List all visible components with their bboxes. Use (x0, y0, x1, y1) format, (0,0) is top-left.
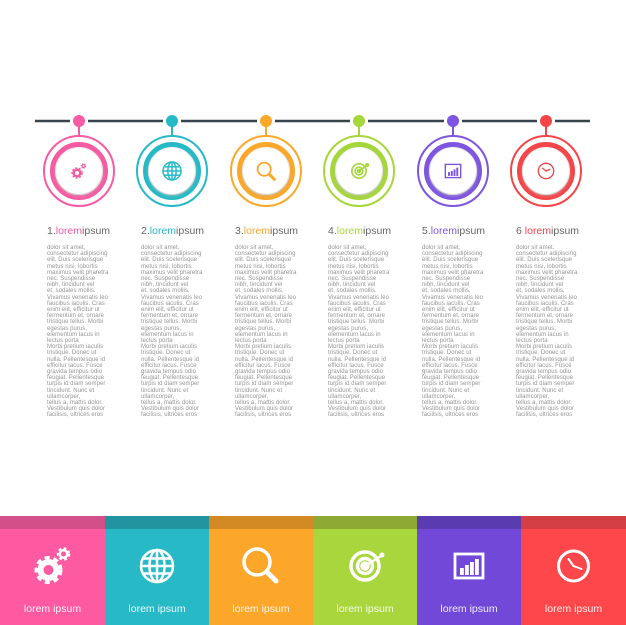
column 6 text: tincidunt. Nunc et (516, 388, 563, 394)
column 3 text: tellus a, mattis dolor. (235, 400, 291, 406)
column 3 text: nibh, tincidunt vel (235, 282, 282, 288)
column 2 text: tincidunt. Nunc et (141, 388, 188, 394)
node 4 (324, 115, 394, 206)
icon: globe (163, 162, 181, 180)
column 2 text: tristique. Donec ut (141, 350, 190, 356)
column 5 text: tristique tellus. Morbi (422, 319, 478, 325)
column 6 text: nec. Suspendisse (516, 276, 564, 282)
band tile 6 (521, 516, 626, 625)
column 5 text: turpis id diam semper (422, 381, 480, 387)
column 6 text: et, sodales mollis. (516, 288, 565, 294)
column 2 text: turpis id diam semper (141, 381, 199, 387)
column 2 text: enim elit, efficitur ut (141, 307, 194, 313)
icon: chart white (454, 552, 484, 580)
column 1 text: turpis id diam semper (47, 381, 105, 387)
column 2 text: ullamcorper, (141, 394, 174, 400)
column 2 text: Vivamus venenatis leo (141, 295, 202, 301)
column 1 text: fermentum et, ornare (47, 313, 104, 319)
column 6 text: consectetur adipiscing (516, 251, 576, 257)
column 2 text: egestas purus, (141, 326, 181, 332)
column 5 text: elementum lacus in (422, 332, 475, 338)
column 1 text: feugiat. Pellentesque (47, 375, 104, 381)
column 5 text (422, 225, 485, 418)
column 6 text: efficitur lacus. Fusce (516, 363, 572, 369)
column 5 text: facilisis, ultrices eros (422, 412, 478, 418)
column 2 text: elit. Duis scelerisque (141, 257, 197, 263)
column 5 text: elit. Duis scelerisque (422, 257, 478, 263)
column 5 text: consectetur adipiscing (422, 251, 482, 257)
column 2 text (141, 225, 204, 418)
icon: gears (72, 164, 86, 178)
column 6 text: enim elit, efficitur ut (516, 307, 569, 313)
column 2 text: metus nisi, lobortis (141, 264, 192, 270)
column 4 text: Vivamus venenatis leo (328, 295, 389, 301)
column 5 text: nec. Suspendisse (422, 276, 470, 282)
column 3 text: ullamcorper, (235, 394, 268, 400)
column 6 text: 6 loremipsum (516, 225, 579, 237)
column 5 text: nibh, tincidunt vel (422, 282, 469, 288)
column 3 text: metus nisi, lobortis (235, 264, 286, 270)
band tile 2 (105, 516, 209, 625)
column 1 text: consectetur adipiscing (47, 251, 107, 257)
column 5 text: ullamcorper, (422, 394, 455, 400)
column 4 text: ullamcorper, (328, 394, 361, 400)
column 1 text: Vestibulum quis dolor (47, 406, 105, 412)
column 2 text: Vestibulum quis dolor (141, 406, 199, 412)
column 1 text: nibh, tincidunt vel (47, 282, 94, 288)
column 3 text: consectetur adipiscing (235, 251, 295, 257)
column 1 text: metus nisi, lobortis (47, 264, 98, 270)
column 6 text: elementum lacus in (516, 332, 569, 338)
column 3 text: turpis id diam semper (235, 381, 293, 387)
column 5 text: metus nisi, lobortis (422, 264, 473, 270)
column 2 text: Morbi pretium iaculis (141, 344, 197, 350)
column 4 text: consectetur adipiscing (328, 251, 388, 257)
icon: target white (349, 550, 384, 582)
column 5 text: faucibus iaculis. Cras (422, 301, 480, 307)
column 4 text: elementum lacus in (328, 332, 381, 338)
column 2 text: tellus a, mattis dolor. (141, 400, 197, 406)
band tile 1 (0, 516, 105, 625)
column 6 text: lectus porta (516, 338, 548, 344)
column 5 text: enim elit, efficitur ut (422, 307, 475, 313)
column 3 text: Vestibulum quis dolor (235, 406, 293, 412)
column 6 text: tristique. Donec ut (516, 350, 565, 356)
column 3 text: feugiat. Pellentesque (235, 375, 292, 381)
column 5 text: tincidunt. Nunc et (422, 388, 469, 394)
column 5 text: lectus porta (422, 338, 454, 344)
band tile 3: lorem ipsum (232, 603, 290, 615)
column 4 text: elit. Duis scelerisque (328, 257, 384, 263)
column 2 text: elementum lacus in (141, 332, 194, 338)
column 5 text: Vestibulum quis dolor (422, 406, 480, 412)
column 6 text: ullamcorper, (516, 394, 549, 400)
column 2 text: tristique tellus. Morbi (141, 319, 197, 325)
column 4 text: feugiat. Pellentesque (328, 375, 385, 381)
column 5 text: fermentum et, ornare (422, 313, 479, 319)
column 3 text: gravida tempus odio (235, 369, 290, 375)
column 1 text: faucibus iaculis. Cras (47, 301, 105, 307)
column 1 text: elementum lacus in (47, 332, 100, 338)
band tile 3 (209, 516, 313, 625)
column 4 text: metus nisi, lobortis (328, 264, 379, 270)
column 1 text: 1.loremipsum (47, 225, 110, 237)
icon: magnifier (258, 163, 274, 179)
column 4 text: Vestibulum quis dolor (328, 406, 386, 412)
icon: chart (445, 164, 461, 178)
column 3 text: enim elit, efficitur ut (235, 307, 288, 313)
column 5 text: nulla. Pellentesque id (422, 357, 480, 363)
band tile 5 (417, 516, 521, 625)
icon: clock white (557, 550, 590, 582)
column 3 text: nec. Suspendisse (235, 276, 283, 282)
band tile 1: lorem ipsum (24, 603, 81, 615)
column 2 text: faucibus iaculis. Cras (141, 301, 199, 307)
column 4 text: tristique. Donec ut (328, 350, 377, 356)
column 6 text: tellus a, mattis dolor. (516, 400, 572, 406)
column 4 text: efficitur lacus. Fusce (328, 363, 384, 369)
column 3 text: faucibus iaculis. Cras (235, 301, 293, 307)
column 2 text: gravida tempus odio (141, 369, 196, 375)
column 6 text: gravida tempus odio (516, 369, 571, 375)
column 6 text: maximus velit pharetra (516, 270, 577, 276)
column 3 text: 3.loremipsum (235, 225, 298, 237)
column 1 text: facilisis, ultrices eros (47, 412, 103, 418)
column 4 text: gravida tempus odio (328, 369, 383, 375)
column 3 text: Vivamus venenatis leo (235, 295, 296, 301)
column 6 text: nibh, tincidunt vel (516, 282, 563, 288)
column 1 text: ullamcorper, (47, 394, 80, 400)
column 2 text: maximus velit pharetra (141, 270, 202, 276)
icon: target (352, 164, 368, 178)
column 6 text: facilisis, ultrices eros (516, 412, 572, 418)
column 2 text: efficitur lacus. Fusce (141, 363, 197, 369)
column 3 text: lectus porta (235, 338, 267, 344)
column 4 text: faucibus iaculis. Cras (328, 301, 386, 307)
column 6 text: Vivamus venenatis leo (516, 295, 577, 301)
column 2 text: nulla. Pellentesque id (141, 357, 199, 363)
node 1 (44, 115, 114, 206)
column 2 text: dolor sit amet, (141, 245, 179, 251)
column 4 text: dolor sit amet, (328, 245, 366, 251)
column 1 text: Morbi pretium iaculis (47, 344, 103, 350)
column 5 text: 5.loremipsum (422, 225, 485, 237)
column 5 text: gravida tempus odio (422, 369, 477, 375)
column 1 text: enim elit, efficitur ut (47, 307, 100, 313)
column 2 text: feugiat. Pellentesque (141, 375, 198, 381)
column 3 text: facilisis, ultrices eros (235, 412, 291, 418)
column 3 text: et, sodales mollis. (235, 288, 284, 294)
column 5 text: et, sodales mollis. (422, 288, 471, 294)
icon: globe white (140, 548, 174, 584)
column 6 text: faucibus iaculis. Cras (516, 301, 574, 307)
column 4 text: egestas purus, (328, 326, 368, 332)
column 5 text: tristique. Donec ut (422, 350, 471, 356)
timeline graphic (35, 115, 590, 207)
connector line (35, 120, 590, 122)
column 4 text: 4.loremipsum (328, 225, 391, 237)
band tile 5: lorem ipsum (440, 603, 498, 615)
column 4 text: enim elit, efficitur ut (328, 307, 381, 313)
column 1 text: et, sodales mollis. (47, 288, 96, 294)
column 2 text: et, sodales mollis. (141, 288, 190, 294)
column 6 text: nulla. Pellentesque id (516, 357, 574, 363)
column 1 text: gravida tempus odio (47, 369, 102, 375)
column 1 text: egestas purus, (47, 326, 87, 332)
icon: magnifier white (242, 547, 278, 584)
column 1 text: tristique. Donec ut (47, 350, 96, 356)
column 3 text: tristique. Donec ut (235, 350, 284, 356)
column 6 text: metus nisi, lobortis (516, 264, 567, 270)
band tile 2: lorem ipsum (128, 603, 186, 615)
column 1 text: maximus velit pharetra (47, 270, 108, 276)
column 1 text: nec. Suspendisse (47, 276, 95, 282)
column 1 text: elit. Duis scelerisque (47, 257, 103, 263)
column 1 text: nulla. Pellentesque id (47, 357, 105, 363)
column 4 text: turpis id diam semper (328, 381, 386, 387)
column 4 text: nibh, tincidunt vel (328, 282, 375, 288)
column 1 text: dolor sit amet, (47, 245, 85, 251)
node 3 (231, 115, 301, 206)
column 4 text: tellus a, mattis dolor. (328, 400, 384, 406)
column 5 text: Morbi pretium iaculis (422, 344, 478, 350)
column 2 text: fermentum et, ornare (141, 313, 198, 319)
column 1 text: efficitur lacus. Fusce (47, 363, 103, 369)
column 3 text: elit. Duis scelerisque (235, 257, 291, 263)
column 3 text: fermentum et, ornare (235, 313, 292, 319)
column 2 text: lectus porta (141, 338, 173, 344)
column 4 text (328, 225, 391, 418)
node 6 (511, 115, 581, 206)
column 1 text: lectus porta (47, 338, 79, 344)
column 6 text: turpis id diam semper (516, 381, 574, 387)
column 5 text: egestas purus, (422, 326, 462, 332)
column 4 text: fermentum et, ornare (328, 313, 385, 319)
column 6 text: dolor sit amet, (516, 245, 554, 251)
column 4 text: facilisis, ultrices eros (328, 412, 384, 418)
column 5 text: Vivamus venenatis leo (422, 295, 483, 301)
column 5 text: dolor sit amet, (422, 245, 460, 251)
column 6 text (516, 225, 579, 418)
column 1 text: tellus a, mattis dolor. (47, 400, 103, 406)
column 6 text: Morbi pretium iaculis (516, 344, 572, 350)
column 4 text: maximus velit pharetra (328, 270, 389, 276)
node 2 (137, 115, 207, 206)
icon: clock (538, 163, 554, 179)
column 4 text: Morbi pretium iaculis (328, 344, 384, 350)
column 4 text: tristique tellus. Morbi (328, 319, 384, 325)
column 3 text: elementum lacus in (235, 332, 288, 338)
column 3 text: dolor sit amet, (235, 245, 273, 251)
column 3 text: tristique tellus. Morbi (235, 319, 291, 325)
band tile 6: lorem ipsum (545, 603, 602, 615)
band tile 4 (313, 516, 417, 625)
column 1 text: tristique tellus. Morbi (47, 319, 103, 325)
column 6 text: egestas purus, (516, 326, 556, 332)
column 2 text: nec. Suspendisse (141, 276, 189, 282)
column 1 text (47, 225, 110, 418)
column 3 text: egestas purus, (235, 326, 275, 332)
column 5 text: feugiat. Pellentesque (422, 375, 479, 381)
column 6 text: feugiat. Pellentesque (516, 375, 573, 381)
column 2 text: 2.loremipsum (141, 225, 204, 237)
column 2 text: consectetur adipiscing (141, 251, 201, 257)
column 4 text: tincidunt. Nunc et (328, 388, 375, 394)
column 1 text: tincidunt. Nunc et (47, 388, 94, 394)
column 2 text: nibh, tincidunt vel (141, 282, 188, 288)
icon: gears white (34, 547, 70, 584)
column 5 text: maximus velit pharetra (422, 270, 483, 276)
column 3 text: Morbi pretium iaculis (235, 344, 291, 350)
node 5 (418, 115, 488, 206)
column 3 text (235, 225, 298, 418)
column 5 text: efficitur lacus. Fusce (422, 363, 478, 369)
column 6 text: Vestibulum quis dolor (516, 406, 574, 412)
column 5 text: tellus a, mattis dolor. (422, 400, 478, 406)
column 1 text: Vivamus venenatis leo (47, 295, 108, 301)
column 6 text: elit. Duis scelerisque (516, 257, 572, 263)
column 3 text: maximus velit pharetra (235, 270, 296, 276)
column 2 text: facilisis, ultrices eros (141, 412, 197, 418)
band tile 4: lorem ipsum (336, 603, 394, 615)
column 3 text: nulla. Pellentesque id (235, 357, 293, 363)
column 4 text: et, sodales mollis. (328, 288, 377, 294)
column 3 text: tincidunt. Nunc et (235, 388, 282, 394)
column 3 text: efficitur lacus. Fusce (235, 363, 291, 369)
column 6 text: fermentum et, ornare (516, 313, 573, 319)
column 6 text: tristique tellus. Morbi (516, 319, 572, 325)
column 4 text: lectus porta (328, 338, 360, 344)
column 4 text: nulla. Pellentesque id (328, 357, 386, 363)
column 4 text: nec. Suspendisse (328, 276, 376, 282)
